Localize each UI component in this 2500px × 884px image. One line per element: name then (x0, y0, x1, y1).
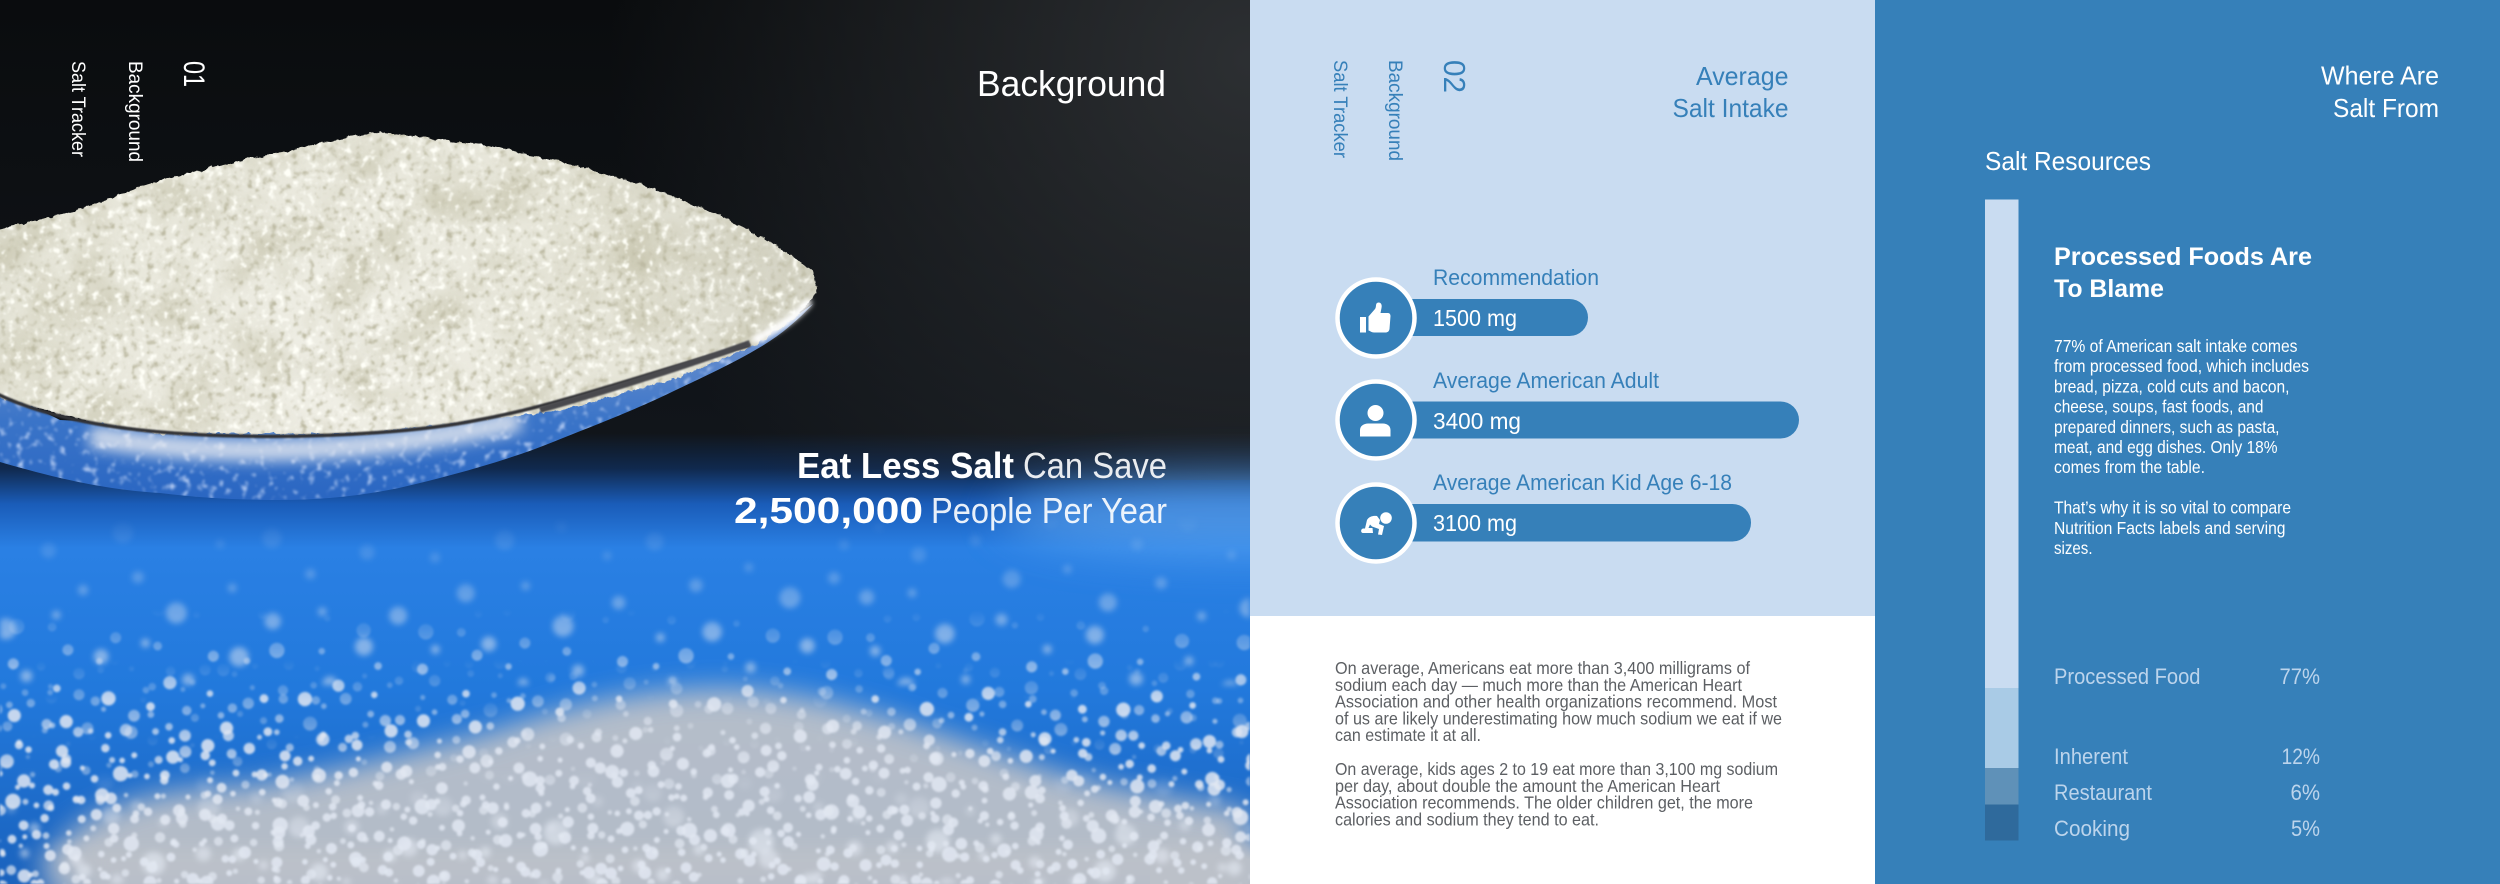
legend: cooking 5% (2054, 816, 2320, 841)
subheading: Salt Resources: Salt Resources (1985, 146, 2151, 176)
row: recommendation (1338, 265, 1599, 356)
callout body text: from processed food, which includes (2054, 356, 2309, 376)
photo: spoon bowl (0, 304, 813, 500)
photo: spoon rim and highlight (0, 303, 808, 436)
row: average American adult: Average American Adult (1433, 368, 1659, 393)
panel: sodium explanation text: On average, Americans eat more than 3,400 milligrams of (1335, 658, 1750, 678)
panel: salt resources (1875, 0, 2500, 884)
headline line 2: 2,500,000 (734, 490, 923, 531)
heading: Where Are Salt From (2321, 60, 2439, 123)
vertical label: Salt Tracker: Salt Tracker (67, 61, 89, 157)
legend: restaurant 6%: 6% (2290, 780, 2320, 805)
headline line 2 (734, 490, 1167, 531)
legend: processed food 77%: Processed Food (2054, 664, 2200, 689)
callout body text: comes from the table. (2054, 457, 2205, 477)
panel: sodium explanation text: calories and sodium they tend to eat. (1335, 810, 1599, 830)
photo: salt mound in spoon (0, 132, 817, 434)
row: recommendation: Recommendation (1433, 265, 1599, 290)
stacked bar: salt sources (1985, 200, 2018, 840)
panel: sodium explanation text: Association recommends. The older children get, the more (1335, 792, 1753, 812)
vertical label: Salt Tracker: Salt Tracker (1329, 60, 1351, 158)
icon: thumbs up (1338, 280, 1414, 356)
heading: Average Salt Intake: Average (1696, 61, 1788, 91)
legend: inherent 12%: 12% (2282, 744, 2320, 769)
headline line 1 (797, 445, 1167, 486)
panel: sodium explanation text: Association and other health organizations recommend. Most (1335, 692, 1777, 712)
section number 01: 01 (177, 61, 210, 87)
callout heading: Processed Foods Are (2054, 243, 2312, 271)
bar: 3400 mg (1376, 402, 1799, 438)
legend: inherent 12% (2054, 744, 2320, 769)
row: average American kid: Average American Kid Age 6-18 (1433, 470, 1732, 495)
panel: sodium explanation text: can estimate it at all. (1335, 725, 1481, 745)
headline line 1: Eat Less Salt (797, 445, 1014, 486)
legend: cooking 5%: 5% (2291, 816, 2320, 841)
panel: photo background (0, 0, 1250, 884)
callout body text: Nutrition Facts labels and serving (2054, 518, 2286, 538)
callout body text: prepared dinners, such as pasta, (2054, 417, 2280, 437)
row: average American adult (1338, 368, 1799, 458)
callout body text: 77% of American salt intake comes (2054, 336, 2298, 356)
heading: Where Are Salt From: Salt From (2333, 93, 2439, 123)
heading: Where Are Salt From: Where Are (2321, 60, 2439, 90)
legend: processed food 77% (2054, 664, 2320, 689)
panel: sodium explanation text: sodium each day — much more than the American Heart (1335, 675, 1742, 695)
heading: Average Salt Intake: Salt Intake (1672, 93, 1788, 123)
icon: crawling baby (1338, 484, 1414, 562)
bar: 3100 mg (1376, 504, 1751, 542)
callout body text: meat, and egg dishes. Only 18% (2054, 437, 2278, 457)
panel: sodium explanation text: per day, about double the amount the American Heart (1335, 776, 1720, 796)
panel 1 labels (67, 61, 1167, 531)
panel: sodium explanation text: of us are likely underestimating how much sodium we eat if we (1335, 708, 1782, 728)
callout body text: cheese, soups, fast foods, and (2054, 396, 2264, 416)
row: average American kid: 3100 mg (1433, 510, 1517, 536)
callout heading: To Blame (2054, 275, 2164, 303)
bar: 1500 mg (1376, 299, 1588, 336)
callout body text: That’s why it is so vital to compare (2054, 498, 2291, 518)
row: average American kid (1338, 470, 1751, 562)
panel: sodium explanation text: On average, kids ages 2 to 19 eat more than 3,100 mg sodium (1335, 759, 1778, 779)
headline line 2: People Per Year (931, 490, 1167, 531)
panel: sodium explanation text (1250, 616, 1875, 884)
heading: Background: Background (977, 63, 1166, 104)
callout body text: bread, pizza, cold cuts and bacon, (2054, 376, 2290, 396)
legend: restaurant 6% (2054, 780, 2320, 805)
headline line 1: Can Save (1023, 445, 1167, 486)
legend: processed food 77%: 77% (2280, 664, 2320, 689)
icon: person (1338, 382, 1414, 458)
photo backdrop (0, 0, 1250, 884)
legend: restaurant 6%: Restaurant (2054, 780, 2152, 805)
callout heading (2054, 243, 2312, 303)
panel: average salt intake (1250, 0, 1875, 616)
legend: inherent 12%: Inherent (2054, 744, 2128, 769)
row: average American adult: 3400 mg (1433, 408, 1521, 434)
photo: salt scattered on blue surface (0, 515, 1250, 884)
vertical label: Background: Background (124, 61, 146, 162)
legend: cooking 5%: Cooking (2054, 816, 2130, 841)
callout body text (2054, 336, 2309, 558)
row: recommendation: 1500 mg (1433, 305, 1517, 331)
section number 02: 02 (1437, 60, 1472, 93)
vertical label: Background: Background (1384, 60, 1406, 161)
callout body text: sizes. (2054, 538, 2092, 558)
heading: Average Salt Intake (1672, 61, 1788, 123)
